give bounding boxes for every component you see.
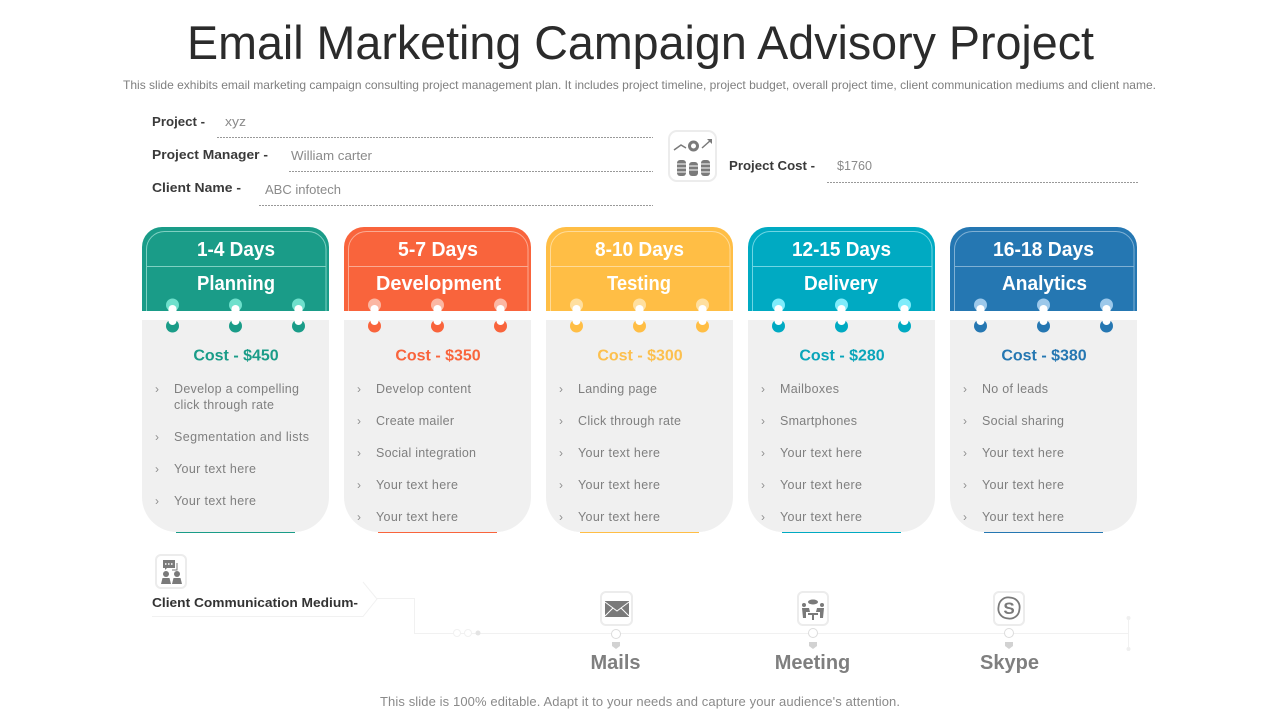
- list: ›: [357, 478, 361, 492]
- cost: Cost - $350: [395, 348, 481, 364]
- list: ›: [559, 478, 563, 492]
- list: ›: [761, 510, 765, 524]
- binder rings: [546, 298, 733, 332]
- panel: analytics: [950, 227, 1137, 533]
- list: [761, 382, 862, 524]
- list: ›: [761, 414, 765, 428]
- list: [559, 382, 681, 524]
- list: click through rate: [174, 398, 274, 412]
- list: ›: [155, 462, 159, 476]
- panel: delivery: [748, 227, 935, 533]
- list: ›: [761, 382, 765, 396]
- list: ›: [761, 478, 765, 492]
- cost: Cost - $450: [193, 348, 279, 364]
- project details form: William carter: [291, 148, 373, 163]
- list: Your text here: [174, 462, 256, 476]
- icon: envelope: [601, 592, 632, 625]
- list: ›: [155, 430, 159, 444]
- channel: meeting: Meeting: [775, 652, 850, 674]
- list: ›: [963, 414, 967, 428]
- list: ›: [963, 478, 967, 492]
- phase name: Analytics: [1002, 273, 1087, 295]
- duration: 16-18 Days: [993, 239, 1094, 261]
- phase name: Testing: [607, 273, 671, 295]
- list: [963, 382, 1064, 524]
- project cost: Project Cost -: [729, 158, 815, 173]
- list: ›: [559, 510, 563, 524]
- channel: mails: Mails: [590, 652, 641, 674]
- list: ›: [357, 510, 361, 524]
- list: Smartphones: [780, 414, 857, 428]
- binder rings: [748, 298, 935, 332]
- list: ›: [761, 446, 765, 460]
- binder rings: [344, 298, 531, 332]
- duration: 5-7 Days: [398, 239, 478, 261]
- footer note: This slide is 100% editable. Adapt it to your needs and capture your audience's attention.: [380, 694, 900, 709]
- list: ›: [357, 446, 361, 460]
- phase name: Development: [376, 273, 501, 295]
- panel: planning: [142, 227, 329, 533]
- list: Segmentation and lists: [174, 430, 309, 444]
- list: Your text here: [376, 478, 458, 492]
- duration: 12-15 Days: [792, 239, 891, 261]
- binder rings: [142, 298, 329, 332]
- list: Your text here: [780, 510, 862, 524]
- title: Email Marketing Campaign Advisory Project: [187, 16, 1094, 69]
- list: ›: [559, 382, 563, 396]
- project details form: ABC infotech: [265, 182, 341, 197]
- phase name: Delivery: [804, 273, 879, 295]
- list: Your text here: [578, 510, 660, 524]
- icon: project cost chart and coins: [669, 131, 716, 181]
- list: Social integration: [376, 446, 476, 460]
- subtitle: This slide exhibits email marketing campaign consulting project management plan. It includes project timeline, project budget, overall project time, client communication mediums and client name.: [123, 78, 1156, 92]
- project details form: Project -: [152, 114, 205, 129]
- project details form: Project Manager -: [152, 147, 268, 162]
- icon: meeting: [798, 592, 828, 625]
- client communication medium heading: Client Communication Medium-: [152, 595, 358, 610]
- list: Your text here: [982, 446, 1064, 460]
- list: Develop a compelling: [174, 382, 299, 396]
- list: ›: [155, 494, 159, 508]
- project details form: xyz: [225, 114, 246, 129]
- cost: Cost - $280: [799, 348, 885, 364]
- list: Your text here: [376, 510, 458, 524]
- list: ›: [155, 382, 159, 396]
- list: Social sharing: [982, 414, 1064, 428]
- project details form: [152, 114, 653, 206]
- project cost: [729, 158, 1138, 182]
- duration: 1-4 Days: [197, 239, 275, 261]
- list: Your text here: [780, 478, 862, 492]
- list: ›: [559, 446, 563, 460]
- list: Create mailer: [376, 414, 454, 428]
- list: Your text here: [578, 446, 660, 460]
- list: ›: [963, 510, 967, 524]
- list: Click through rate: [578, 414, 681, 428]
- list: No of leads: [982, 382, 1048, 396]
- duration: 8-10 Days: [595, 239, 684, 261]
- list: Your text here: [174, 494, 256, 508]
- list: Your text here: [780, 446, 862, 460]
- list: Develop content: [376, 382, 472, 396]
- project details form: Client Name -: [152, 180, 241, 195]
- list: [155, 382, 309, 508]
- list: ›: [963, 382, 967, 396]
- list: ›: [963, 446, 967, 460]
- list: Landing page: [578, 382, 657, 396]
- list: ›: [357, 382, 361, 396]
- list: ›: [357, 414, 361, 428]
- channel: meeting: [775, 592, 850, 674]
- project cost: $1760: [837, 158, 872, 173]
- panel: development: [344, 227, 531, 533]
- channel: skype: [980, 592, 1039, 674]
- connector timeline: [152, 582, 1130, 651]
- icon: client communication: [156, 555, 186, 588]
- list: Your text here: [982, 510, 1064, 524]
- channel: skype: Skype: [980, 652, 1039, 674]
- cost: Cost - $300: [597, 348, 683, 364]
- list: [357, 382, 476, 524]
- channel: mails: [590, 592, 641, 674]
- icon: skype: S: [1003, 599, 1015, 618]
- list: Your text here: [578, 478, 660, 492]
- list: Your text here: [982, 478, 1064, 492]
- binder rings: [950, 298, 1137, 332]
- panel: testing: [546, 227, 733, 533]
- cost: Cost - $380: [1001, 348, 1087, 364]
- phase name: Planning: [197, 273, 275, 295]
- list: ›: [559, 414, 563, 428]
- list: Mailboxes: [780, 382, 839, 396]
